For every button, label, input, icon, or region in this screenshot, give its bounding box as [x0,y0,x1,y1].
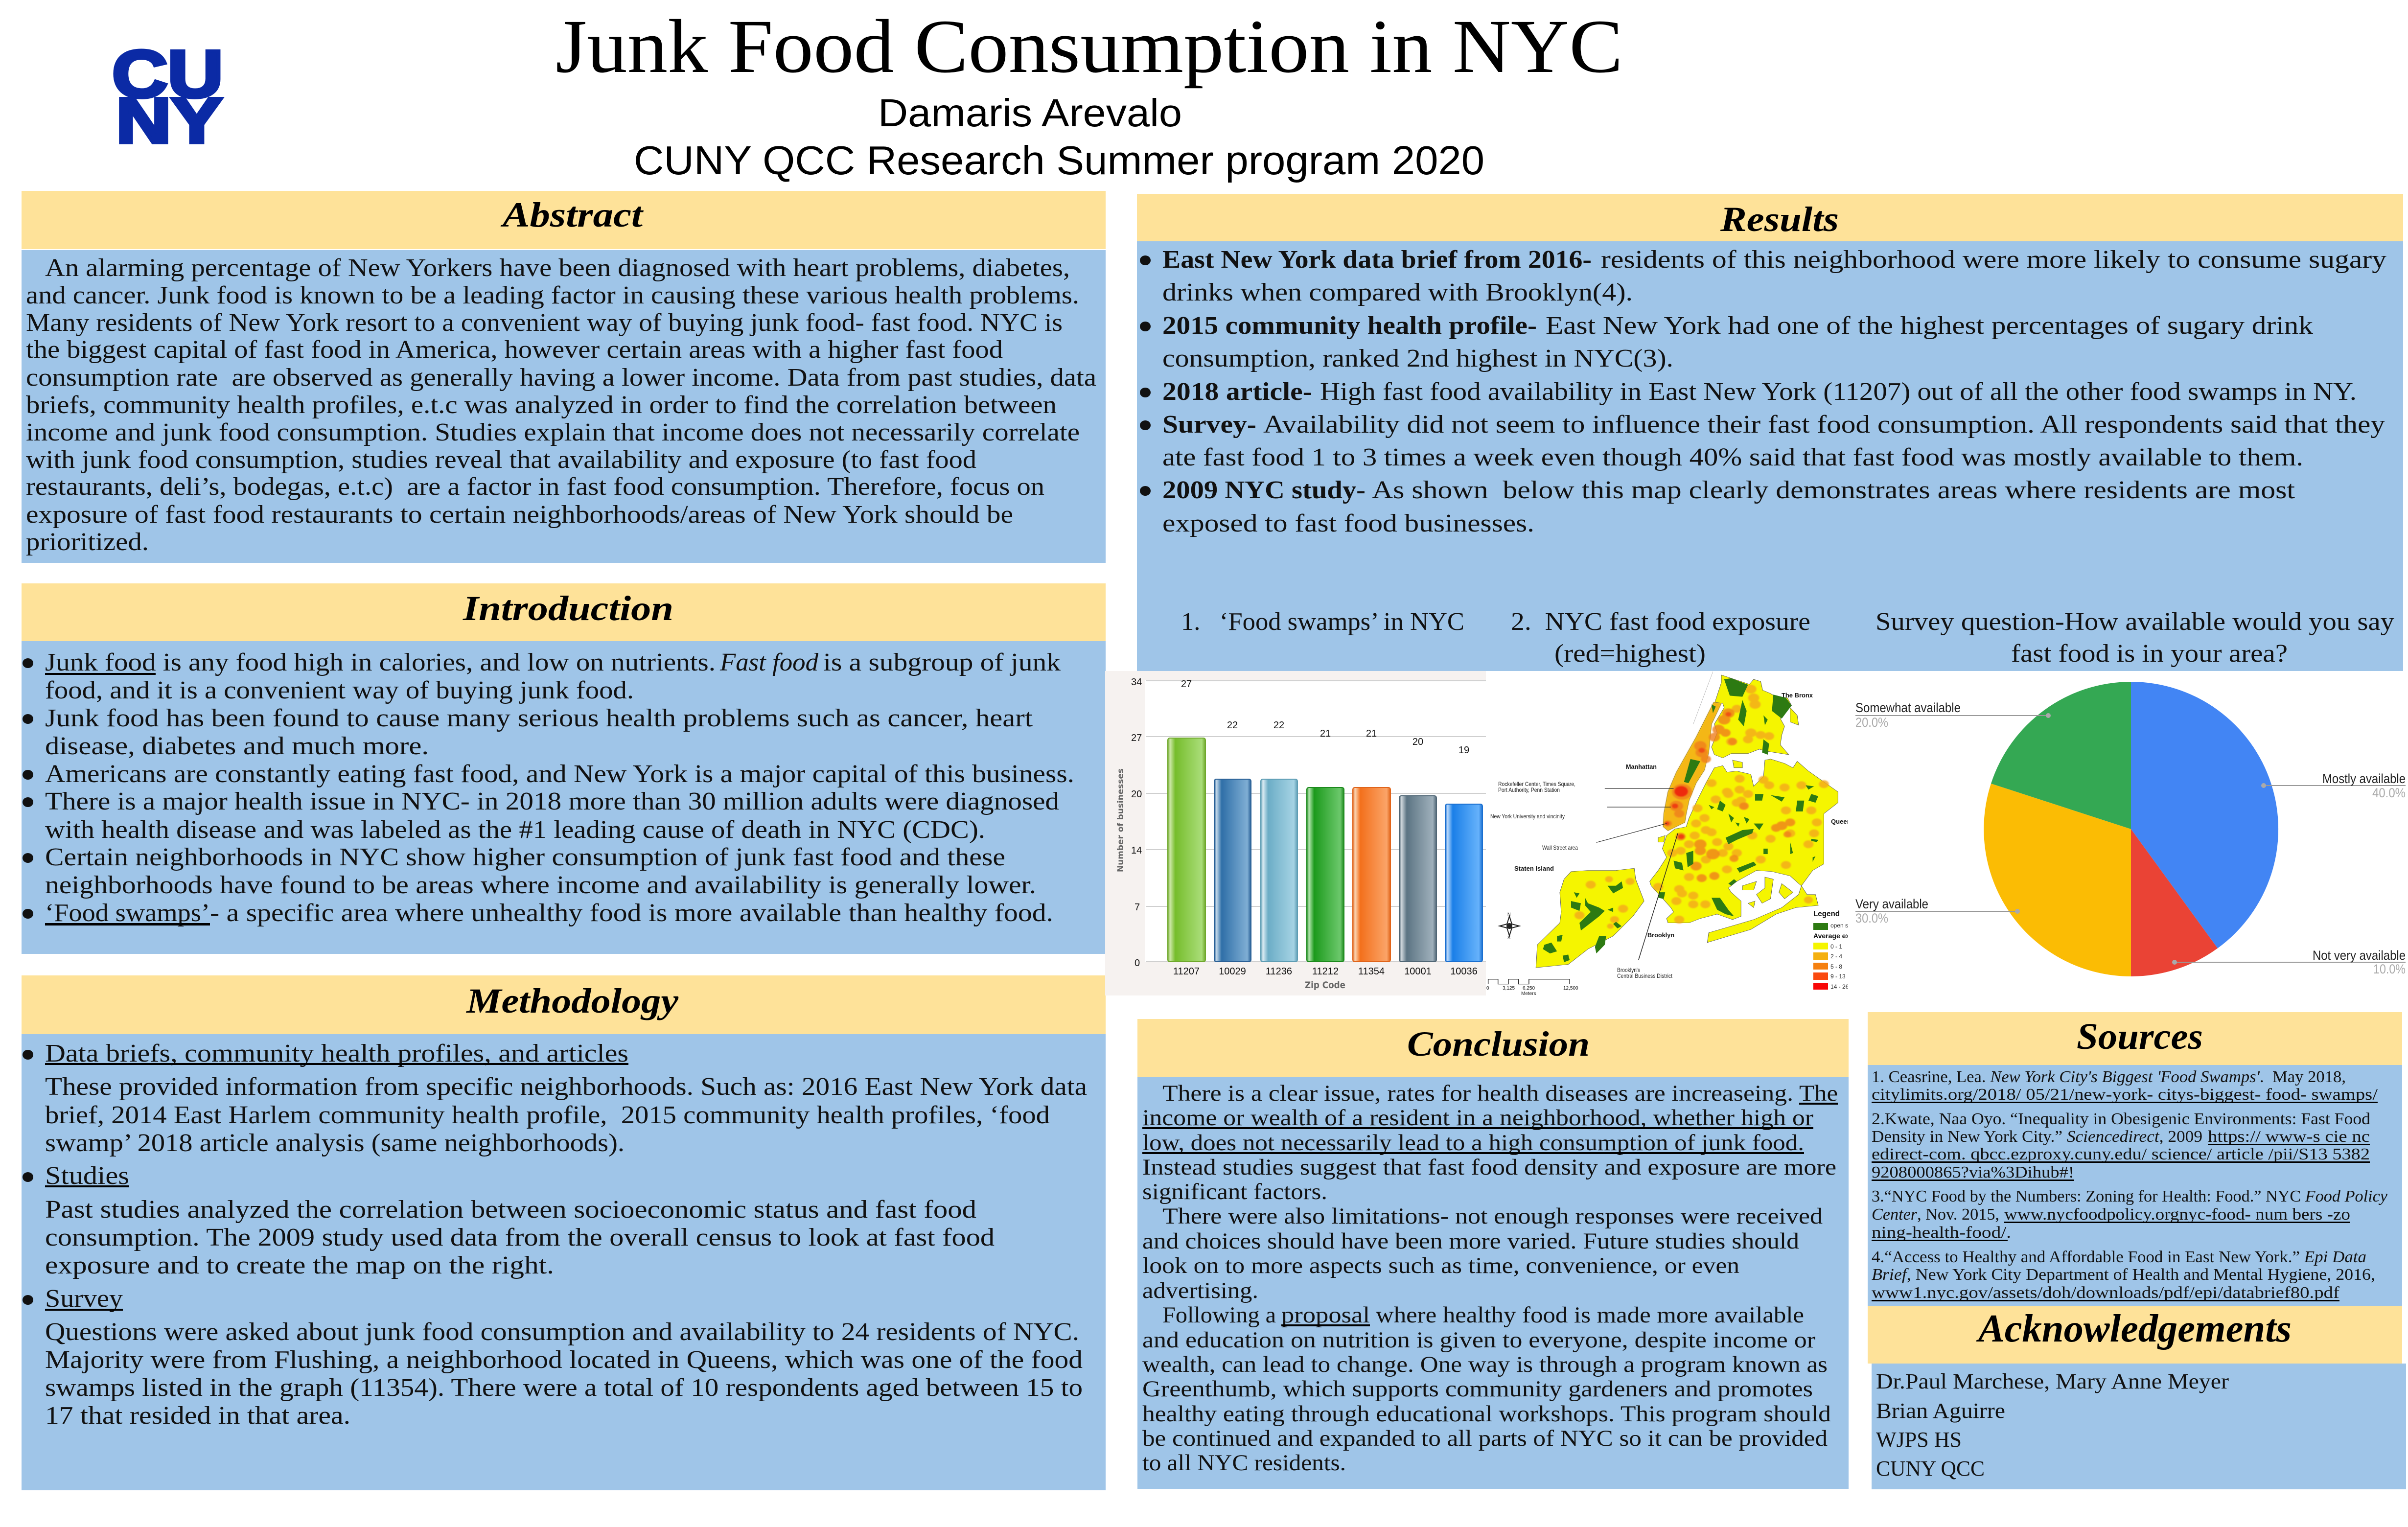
map labels: Wall Street area [1542,844,1578,851]
panel: acknowledgements [1868,1306,2406,1489]
map compass: S [1507,935,1510,940]
map labels: Rockefeller Center, Times Square, [1498,781,1575,787]
pie label: very available: Very available [1855,897,1928,911]
text block: results bullets: residents of this neighborhood were more likely to consume sugary [1601,246,2386,274]
map compass [1500,912,1519,940]
chart caption: survey question: Survey question-How available would you say [1875,608,2394,636]
text block: results bullets [1140,246,2386,537]
map legend: 5 - 8 [1830,963,1842,970]
text block: introduction bullets: with health disease and was labeled as the #1 leading cause of death in NYC (CDC). [45,816,985,844]
text block: methodology items: brief, 2014 East Harlem community health profile, 2015 community health profiles, ‘food [45,1101,1050,1129]
heading: introduction: Introduction [463,589,673,628]
bar values [1181,679,1469,756]
text block: conclusion body: healthy eating through educational workshops. This program should [1142,1401,1831,1427]
text block: results bullets: High fast food availability in East New York (11207) out of all the other food swamps in NY. [1320,378,2357,406]
text block: abstract body: income and junk food consumption. Studies explain that income does not necessarily correlate [26,418,1080,446]
text block: introduction bullets [23,648,1074,927]
text block: abstract body: restaurants, deli’s, bodegas, e.t.c) are a factor in fast food consumption. Therefore, focus on [26,473,1044,501]
slice: very available [1984,784,2131,976]
zip code labels: 10001 [1404,966,1432,977]
text block: conclusion body: Following a [1162,1302,1276,1328]
bar values: 21 [1366,728,1377,739]
chart caption: fast food exposure: (red=highest) [1554,640,1706,668]
text block: conclusion body: Greenthumb, which supports community gardeners and promotes [1142,1376,1813,1402]
text block: methodology items: 17 that resided in that area. [45,1402,350,1430]
bars [1168,738,1482,962]
text block: conclusion body [1142,1081,1838,1476]
text block: introduction bullets: - a specific area where unhealthy food is more available than healthy food. [210,899,1053,927]
y axis title: Number of businesses [1116,768,1126,872]
text block: methodology items: consumption. The 2009 study used data from the overall census to look at fast food [45,1224,995,1251]
map labels: Port Authority, Penn Station [1498,787,1560,793]
y axis ticks: 0 [1135,958,1140,969]
text block: source list: www1.nyc.gov/assets/doh/downloads/pdf/epi/databrief80.pdf [1872,1284,2340,1302]
chart caption: fast food exposure: 2. NYC fast food exposure [1511,608,1810,636]
text block: source list: 1. Ceasrine, Lea. New York City's Biggest 'Food Swamps' . May 2018, [1872,1068,2346,1086]
text block: conclusion body: where healthy food is made more available [1376,1302,1804,1328]
map legend: Average exposure [1813,932,1873,940]
y axis ticks: 34 [1131,677,1142,688]
text block: source list: Center, Nov. 2015, [1872,1205,1999,1224]
panel: results [1137,194,2403,671]
text block: conclusion body: and choices should have been more varied. Future studies should [1142,1228,1799,1254]
text block: introduction bullets: disease, diabetes and much more. [45,732,429,760]
open spaces [1543,678,1818,962]
text block: conclusion body: look on to more aspects such as time, convenience, or even [1142,1253,1739,1278]
heading: conclusion: Conclusion [1407,1024,1590,1064]
text block: acknowledgement names [1876,1369,2229,1481]
text block: results bullets: East New York data brief from 2016- [1162,246,1592,274]
text block: results bullets: As shown below this map clearly demonstrates areas where residents are most [1372,476,2295,504]
chart caption: survey question: fast food is in your area? [2011,640,2288,668]
text block: methodology items: Questions were asked about junk food consumption and availability to 24 residents of NYC. [45,1318,1079,1346]
map shapes [1488,671,1838,984]
text block: source list: 9208000865?via%3Dihub#! [1872,1163,2074,1181]
pie chart: fast food availability survey [1855,682,2406,976]
text block: source list: Brief, New York City Department of Health and Mental Hygiene, 2016, [1872,1266,2375,1284]
map: NYC fast food exposure [1486,671,1873,999]
exposure circles: highest [1665,712,1731,839]
chart caption: food swamps: 1. ‘Food swamps’ in NYC [1181,608,1464,636]
text block: acknowledgement names: Brian Aguirre [1876,1399,2005,1423]
text block: source list: 3.“NYC Food by the Numbers: Zoning for Health: Food.” NYC Food Policy [1872,1187,2388,1205]
text block: introduction bullets: food, and it is a convenient way of buying junk food. [45,676,634,704]
text block: results bullets: Survey- [1162,411,1256,439]
text block: conclusion body: income or wealth of a resident in a neighborhood, whether high or [1142,1105,1813,1131]
slice: somewhat available [1991,682,2131,829]
text block: abstract body: with junk food consumption, studies reveal that availability and exposure (to fast food [26,446,976,474]
pie label: somewhat available: 20.0% [1855,715,1888,730]
text block: source list: edirect-com. qbcc.ezproxy.cuny.edu/ science/ article /pii/S13 5382 [1872,1145,2370,1163]
zip code labels: 11354 [1358,966,1385,977]
bar values: 20 [1412,737,1423,747]
text block: conclusion body: to all NYC residents. [1142,1450,1346,1476]
text block: source list: https:// www-s cie nc [2208,1128,2370,1146]
x axis title: Zip Code [1305,980,1345,991]
text block: results bullets: drinks when compared with Brooklyn(4). [1162,278,1633,306]
map compass: N [1507,912,1510,917]
logo: CUNY: CU [112,37,223,111]
text block: results bullets: 2009 NYC study- [1162,476,1366,504]
chart caption: fast food exposure [1511,608,1810,668]
text block: source list: Density in New York City.” Sciencedirect, 2009 [1872,1128,2202,1146]
text block: acknowledgement names: Dr.Paul Marchese, Mary Anne Meyer [1876,1369,2229,1393]
panel: introduction [22,583,1106,954]
text block: abstract body: Many residents of New York resort to a convenient way of buying junk food- fast food. NYC is [26,309,1063,337]
pie label: somewhat available: Somewhat available [1855,700,1961,715]
text block: introduction bullets: ‘Food swamps’ [45,899,210,927]
heading: acknowledgements: Acknowledgements [1976,1307,2292,1350]
text block: results bullets: consumption, ranked 2nd highest in NYC(3). [1162,345,1673,372]
text block: introduction bullets: Americans are constantly eating fast food, and New York is a major capital of this business. [45,760,1074,788]
text block: source list [1872,1068,2388,1302]
map labels: The Bronx [1782,692,1813,699]
text block: conclusion body: proposal [1281,1302,1370,1328]
text block: methodology items: swamp’ 2018 article analysis (same neighborhoods). [45,1129,625,1157]
leader lines [1488,788,1678,984]
text block: abstract body: consumption rate are observed as generally having a lower income. Data from past studies, data [26,364,1096,392]
text block: introduction bullets: Certain neighborhoods in NYC show higher consumption of junk fast food and these [45,843,1005,871]
text block: introduction bullets: neighborhoods have found to be areas where income and availability is generally lower. [45,871,1036,899]
zip code labels: 11236 [1266,966,1292,977]
text block: methodology items: Past studies analyzed the correlation between socioeconomic status and fast food [45,1196,976,1224]
text block: conclusion body: and education on nutrition is given to everyone, despite income or [1142,1327,1815,1353]
text block: conclusion body: There were also limitations- not enough responses were received [1162,1203,1823,1229]
text block: conclusion body: low, does not necessarily lead to a high consumption of junk food. [1142,1130,1804,1156]
slice: not very available [2131,829,2218,976]
y axis ticks: 14 [1131,845,1142,856]
text block: results bullets: 2018 article- [1162,378,1312,406]
zip code labels: 11207 [1173,966,1200,977]
bar values: 22 [1227,720,1238,731]
map labels: Staten Island [1514,865,1554,872]
text block: results bullets: East New York had one of the highest percentages of sugary drink [1546,312,2313,340]
map legend: 0 - 1 [1830,943,1842,950]
zip code labels [1173,966,1478,977]
map legend: 9 - 13 [1830,973,1846,980]
text block: abstract body: prioritized. [26,528,149,556]
author name: Damaris Arevalo [878,91,1182,135]
exposure circles: moderate [1574,685,1829,929]
bar values: 21 [1320,728,1331,739]
map scale bar labels: 6,250 [1523,986,1535,991]
text block: results bullets: ate fast food 1 to 3 times a week even though 40% said that fast food was mostly available to them. [1162,443,2303,471]
pie label: not very available [2172,948,2406,976]
heading: abstract: Abstract [500,195,644,234]
map scale bar labels: 3,125 [1503,986,1515,991]
text block: source list: ning-health-food/. [1872,1224,2011,1242]
text block: acknowledgement names: WJPS HS [1876,1428,1962,1452]
y axis ticks: 20 [1131,789,1142,800]
text block: methodology items: These provided information from specific neighborhoods. Such as: 2016 East New York data [45,1073,1087,1101]
text block: source list: 2.Kwate, Naa Oyo. “Inequality in Obesigenic Environments: Fast Food [1872,1110,2370,1128]
panel: conclusion [1137,1019,1849,1489]
text block: results bullets: 2015 community health profile- [1162,312,1537,340]
panel: methodology [22,975,1106,1490]
bar values: 22 [1273,720,1284,731]
map legend [1813,910,1873,990]
map labels: Brooklyn's [1617,967,1640,973]
slice: mostly available [2131,682,2278,949]
text block: methodology items [23,1040,1087,1430]
text block: source list: www.nycfoodpolicy.orgnyc-food- num bers -zo [2004,1205,2350,1224]
text block: results bullets: exposed to fast food businesses. [1162,509,1534,537]
pie label: very available: 30.0% [1855,911,1888,925]
pie label: mostly available [2261,771,2406,800]
zip code labels: 10029 [1219,966,1246,977]
bar values: 19 [1459,745,1469,756]
text block: introduction bullets: Junk food is any food high in calories, and low on nutrients. [45,648,716,676]
y axis ticks: 27 [1131,733,1142,743]
y axis ticks [1131,677,1142,969]
text block: conclusion body: be continued and expanded to all parts of NYC so it can be provided [1142,1426,1828,1451]
text block: conclusion body: significant factors. [1142,1179,1327,1204]
zip code labels: 10036 [1450,966,1478,977]
map scale bar labels: 0 [1486,986,1489,991]
logo: CUNY [112,37,223,156]
text block: methodology items: Majority were from Flushing, a neighborhood located in Queens, which was one of the food [45,1346,1083,1374]
heading: methodology: Methodology [466,981,679,1020]
title: Junk Food Consumption in NYC [556,4,1623,89]
panel: abstract [22,191,1106,563]
text block: conclusion body: The [1799,1081,1838,1106]
bar values: 27 [1181,679,1192,690]
text block: abstract body [26,254,1096,556]
text block: acknowledgement names: CUNY QCC [1876,1457,1985,1481]
text block: results bullets: Availability did not seem to influence their fast food consumption. All respondents said that they [1263,411,2385,439]
map legend: open space [1830,922,1861,929]
text block: introduction bullets: is a subgroup of junk [823,648,1061,676]
pie label: somewhat available [1855,700,2051,730]
text block: abstract body: exposure of fast food restaurants to certain neighborhoods/areas of New York should be [26,501,1013,529]
heading: results: Results [1720,200,1839,239]
text block: abstract body: An alarming percentage of New Yorkers have been diagnosed with heart problems, diabetes, [45,254,1070,282]
map labels: Manhattan [1626,763,1657,770]
text block: conclusion body: advertising. [1142,1278,1258,1303]
map labels: Central Business District [1617,972,1673,979]
text block: methodology items: swamps listed in the graph (11354). There were a total of 10 respondents aged between 15 to [45,1374,1083,1402]
bar chart: food swamps by zip code [1105,671,1486,995]
text block: methodology items: Data briefs, community health profiles, and articles [45,1040,628,1067]
text block: methodology items: exposure and to create the map on the right. [45,1251,554,1279]
text block: conclusion body: There is a clear issue, rates for health diseases are increaseing. [1162,1081,1793,1106]
map legend: 2 - 4 [1830,953,1842,960]
text block: conclusion body: Instead studies suggest that fast food density and exposure are more [1142,1155,1836,1180]
chart caption: survey question [1875,608,2394,668]
text block: abstract body: briefs, community health profiles, e.t.c was analyzed in order to find the correlation between [26,391,1057,419]
text block: methodology items: Survey [45,1285,123,1313]
map scale bar labels: Meters [1521,991,1536,996]
y axis ticks: 7 [1135,902,1140,913]
logo: CUNY: NY [116,85,222,156]
pie label: very available [1855,897,2020,925]
text block: introduction bullets: Fast food [719,648,819,676]
text block: conclusion body: wealth, can lead to change. One way is through a program known as [1142,1352,1828,1377]
heading: sources: Sources [2077,1016,2203,1057]
map labels [1490,692,1854,979]
panel: sources [1868,1012,2402,1306]
map labels: New York University and vincinity [1490,813,1565,820]
map scale bar labels: 12,500 [1563,986,1578,991]
text block: introduction bullets: Junk food has been found to cause many serious health problems such as cancer, heart [45,704,1033,732]
map legend: Legend [1813,910,1840,918]
map labels: Brooklyn [1647,931,1674,939]
map scale bar labels [1486,986,1578,996]
text block: source list: 4.“Access to Healthy and Affordable Food in East New York.” Epi Data [1872,1248,2366,1266]
text block: abstract body: and cancer. Junk food is known to be a leading factor in causing these various health problems. [26,281,1079,309]
text block: introduction bullets: There is a major health issue in NYC- in 2018 more than 30 million adults were diagnosed [45,787,1059,815]
text block: abstract body: the biggest capital of fast food in America, however certain areas with a higher fast food [26,336,1003,364]
exposure circles: high [1664,708,1795,882]
program name: CUNY QCC Research Summer program 2020 [634,138,1484,183]
map labels: Queens [1831,818,1854,825]
zip code labels: 11212 [1312,966,1339,977]
text block: methodology items: Studies [45,1162,129,1190]
map legend: 14 - 26 [1830,983,1849,990]
text block: source list: citylimits.org/2018/ 05/21/new-york- citys-biggest- food- swamps/ [1872,1086,2378,1104]
